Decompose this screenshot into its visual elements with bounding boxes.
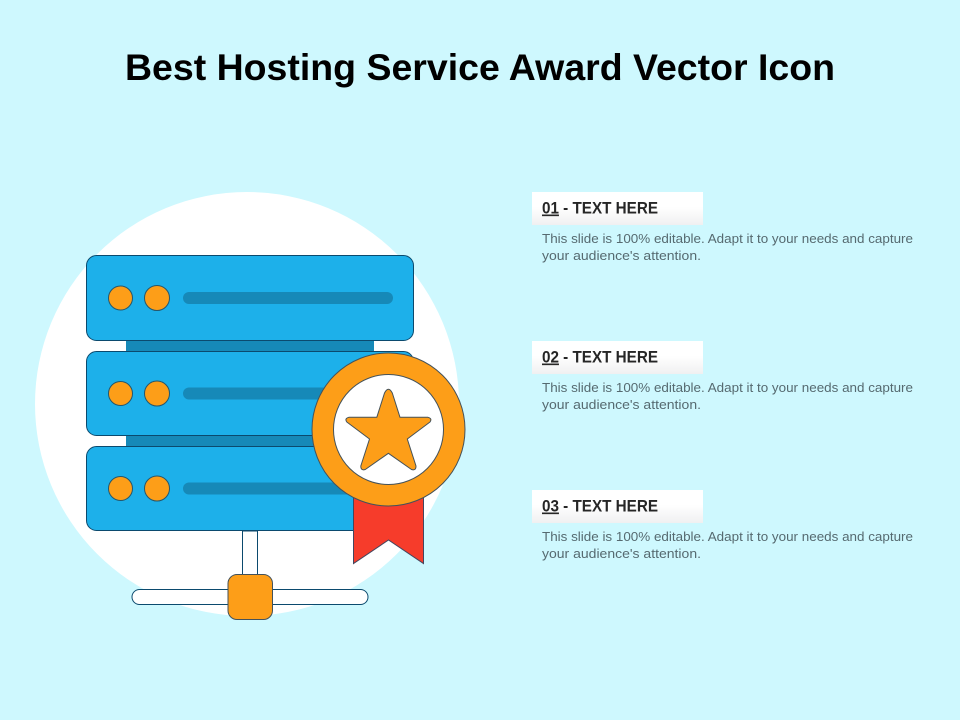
background circle [35, 192, 459, 616]
network stem [242, 531, 258, 591]
title: Best Hosting Service Award Vector Icon [125, 47, 835, 88]
description 01: your audience's attention. [542, 249, 701, 263]
item 03 [532, 490, 913, 561]
network bar [132, 590, 368, 604]
description 02 [542, 381, 913, 412]
icon: star [346, 389, 431, 470]
label 01: 01 - TEXT HERE [542, 200, 658, 218]
description 02: This slide is 100% editable. Adapt it to your needs and capture [542, 381, 913, 395]
description 01: This slide is 100% editable. Adapt it to your needs and capture [542, 232, 913, 246]
icon: server award [86, 256, 465, 620]
label 03 [532, 490, 703, 523]
description 02: your audience's attention. [542, 398, 701, 412]
description 03 [542, 530, 913, 561]
label 02 [532, 341, 703, 374]
item 02 [532, 341, 913, 412]
description 03: your audience's attention. [542, 547, 701, 561]
server unit 2 [86, 352, 414, 436]
network hub [228, 574, 272, 620]
ribbon [354, 490, 424, 564]
server unit 1 [86, 256, 414, 340]
description 01 [542, 232, 913, 263]
server connectors [126, 340, 374, 446]
description 03: This slide is 100% editable. Adapt it to your needs and capture [542, 530, 913, 544]
label 03: 03 - TEXT HERE [542, 498, 658, 516]
medal [312, 353, 465, 506]
label 01 [532, 192, 703, 225]
item 01 [532, 192, 913, 263]
label 02: 02 - TEXT HERE [542, 348, 658, 366]
server unit 3 [86, 446, 414, 530]
